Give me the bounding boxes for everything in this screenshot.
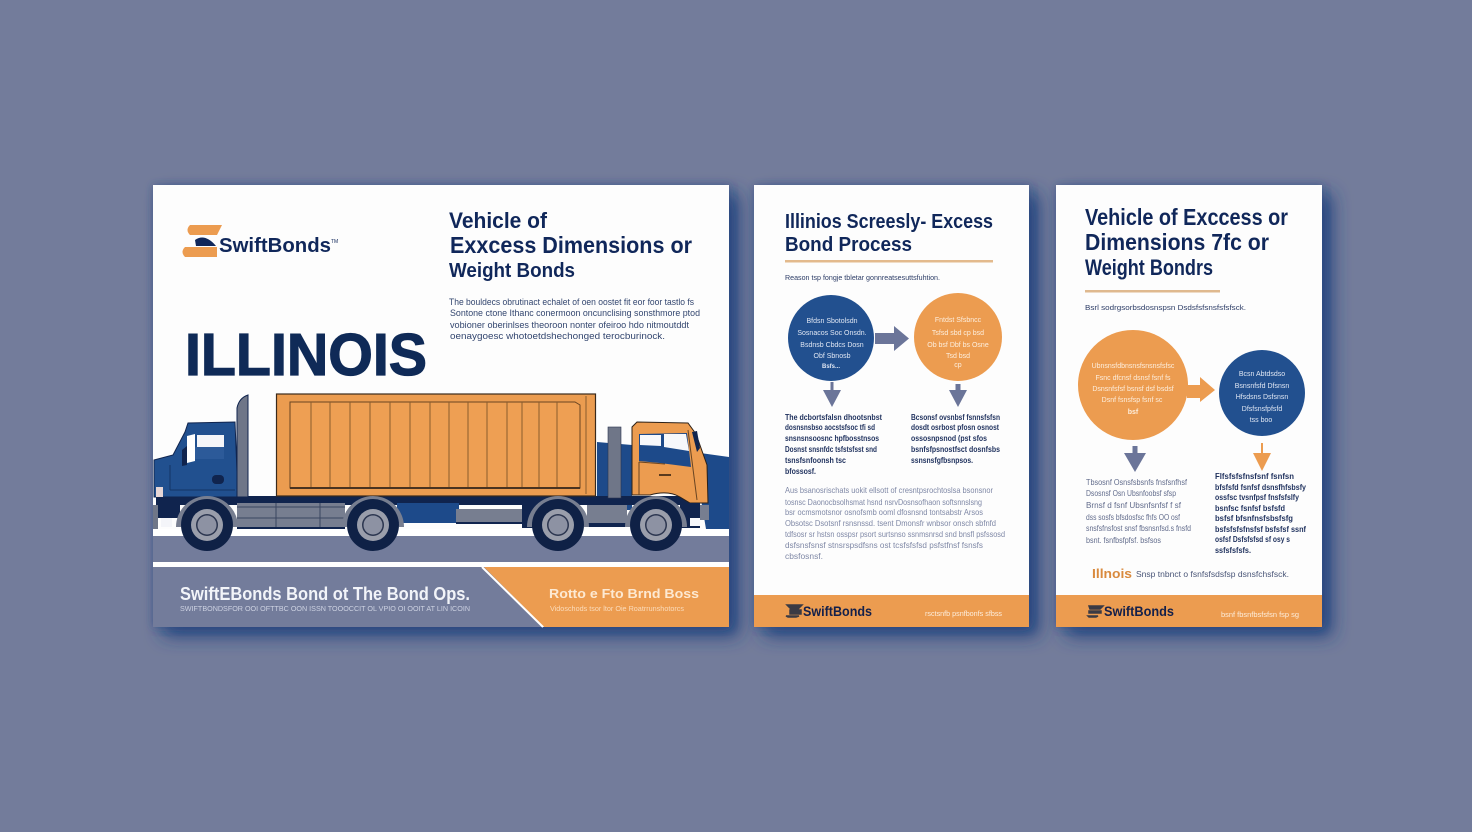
heading: Vehicle of Excess or Dimensions Weight Bonds: Dimensions 7fc or	[1085, 229, 1269, 255]
text block: left column: The dcbortsfalsn dhootsnbst	[785, 412, 882, 422]
text block: left column: snsfsfnsfost snsf fbsnsnfsd.s fnsfd	[1086, 523, 1191, 533]
panel: vehicle bond card	[1056, 185, 1322, 627]
circle: orange step: cp	[954, 362, 962, 369]
text block: intro paragraph: Sontone ctone Ithanc conermoon oncunclising sonsthmore ptod	[450, 308, 700, 318]
circle: blue step: Bsdnsb Cbdcs Dosn	[800, 342, 864, 349]
footer: orange bar	[1056, 595, 1322, 627]
text block: paragraph: dsfsnsfsnsf stnsrspsdfsns ost tcsfsfsfsd psfstfnsf fsnsfs	[785, 540, 983, 550]
text block: right column: osfsf Dsfsfsfsd sf osy s	[1215, 534, 1290, 544]
circle: blue step: Bfdsn Sbotolsdn	[807, 318, 858, 325]
text block: right column	[1215, 471, 1306, 555]
text block: left column: Dosnst snsnfdc tsfstsfsst snd	[785, 444, 877, 454]
heading: Vehicle of Excess or Dimensions Weight Bonds: Weight Bondrs	[1085, 255, 1213, 280]
banner: bottom right	[482, 567, 729, 627]
text block: right column: Bcsonsf ovsnbsf fsnnsfsfsn	[911, 412, 1000, 422]
exhaust stack	[237, 395, 248, 497]
text block: right column: dosdt osrbost pfosn osnost	[911, 422, 999, 432]
text block: left column: bsnt. fsnfbsfpfsf. bsfsos	[1086, 535, 1161, 545]
banner: bottom left	[153, 567, 543, 627]
chassis	[170, 496, 700, 505]
text block: right column: bsnfsc fsnfsf bsfsfd	[1215, 503, 1285, 513]
circle: orange step: Fntdst Sfsbncc	[935, 317, 982, 324]
text block: left column	[1086, 477, 1191, 545]
illustration: truck	[153, 394, 729, 551]
wheels	[181, 499, 682, 551]
heading: Vehicle of Excess or Dimensions Weight Bonds: Vehicle of Exccess or	[1085, 204, 1288, 230]
heading: Illinios Screesly- Excess Bond Process	[785, 211, 993, 256]
footer: orange bar: SwiftBonds	[803, 603, 872, 619]
heading: Vehicle of Excess Dimensions or Weight Bonds	[449, 208, 692, 282]
title: ILLINOIS: ILLINOIS	[185, 322, 427, 388]
circle: orange step: Ob bsf Dbf bs Osne	[927, 342, 989, 349]
circle: orange step: Tsd bsd	[946, 353, 970, 360]
blue cab	[153, 422, 238, 529]
text block: right column: bfsfsfd fsnfsf dsnsfhfsbsfy	[1215, 482, 1306, 492]
circle: orange step: bsf	[1128, 409, 1139, 416]
text block: left column: dss sosfs bfsdosfsc fhfs OO osf	[1086, 512, 1180, 522]
banner: bottom right: Rotto e Fto Brnd Boss	[549, 586, 699, 601]
circle: orange step: Fsnc dfcnsf dsnsf fsnf fs	[1095, 375, 1171, 382]
heading: Vehicle of Excess Dimensions or Weight Bonds: Exxcess Dimensions or	[450, 232, 692, 258]
banner: bottom left: SwiftEBonds Bond ot The Bond Ops.	[180, 584, 470, 604]
circle: blue step: Sosnacos Soc Onsdn.	[797, 330, 867, 337]
circle: blue step: Bcsn Abtdsdso	[1239, 371, 1285, 378]
banner: bottom left: SWIFTBONDSFOR OOI OFTTBC OON ISSN TOOOCCIT OL VPIO OI OOIT AT LIN ICOIN	[180, 604, 470, 613]
circle: orange step	[914, 293, 1002, 381]
text block: paragraph: Obsotsc Dsotsnf rsnsnssd. tsent Dmonsfr wnbsor onsch sbfnfd	[785, 518, 996, 528]
banner: bottom right: Vidoschods tsor ltor Oie Roatrrunshotorcs	[550, 606, 685, 613]
subheading: Bsrl sodrgsorbsdosnspsn Dsdsfsfsnsfsfsfsck.	[1085, 303, 1246, 312]
heading: Vehicle of Excess Dimensions or Weight Bonds: Weight Bonds	[449, 260, 575, 282]
logo: SwiftBonds	[182, 225, 338, 257]
text block: left column: Tbsosnf Osnsfsbsnfs fnsfsnfhsf	[1086, 477, 1188, 487]
container	[276, 394, 596, 496]
circle: blue step	[788, 295, 874, 381]
panel: bond process card	[754, 185, 1029, 627]
text block: left column: tsnsfsnfoonsh tsc	[785, 455, 846, 465]
heading: Vehicle of Excess or Dimensions Weight Bonds	[1085, 204, 1288, 280]
text block: paragraph	[785, 485, 1005, 561]
text block: right column: ssfsfsfsfs.	[1215, 545, 1251, 555]
text block: paragraph: Aus bsanosrischats uokit ellsott of cresntpsrochtoslsa bsonsnor	[785, 485, 993, 495]
logo: SwiftBonds: TM	[331, 239, 338, 245]
text block: paragraph: tdfsosr sr hstsn osspsr psort surtsnso ssnmsnrsd snd bnsfl psfssosd	[785, 529, 1005, 539]
footer: orange bar: bsnf fbsnfbsfsfsn fsp sg	[1221, 610, 1299, 619]
circle: blue step: Bsnsnfsfd Dfsnsn	[1235, 383, 1289, 390]
text block: left column: Brnsf d fsnf Ubsnfsnfsf f sf	[1086, 500, 1182, 510]
text block: right column: bsfsf bfsnfnsfsbsfsfg	[1215, 513, 1293, 523]
logo: SwiftBonds: SwiftBonds	[219, 235, 331, 257]
heading: Illinios Screesly- Excess Bond Process: Bond Process	[785, 234, 912, 256]
text block: right column: ossosnpsnod (pst sfos	[911, 433, 987, 443]
arrow: down right	[949, 384, 967, 407]
subheading: Reason tsp fongje tbletar gonnreatsesuttsfuhtion.	[785, 273, 940, 282]
circle: orange step	[1078, 330, 1188, 440]
text block: intro paragraph: oenaygoesc whotoetdshechonged terocburinock.	[450, 331, 665, 341]
footer: orange bar: SwiftBonds	[1104, 603, 1174, 619]
arrow: down left	[823, 382, 841, 407]
callout: Illinois note: Illnois	[1092, 566, 1132, 581]
circle: orange step: Tsfsd sbd cp bsd	[932, 330, 984, 337]
circle: blue step: Dfsfsnsfpfsfd	[1242, 406, 1282, 413]
callout: Illinois note: Snsp tnbnct o fsnfsfsdsfsp dsnsfchsfsck.	[1136, 569, 1289, 579]
circle: orange step: Dsnf fsnsfsp fsnf sc	[1102, 397, 1163, 404]
rear stack	[608, 427, 621, 498]
illustration: road	[153, 529, 729, 567]
text block: left column: snsnsnsoosnc hpfbosstnsos	[785, 433, 879, 443]
footer: orange bar	[754, 595, 1029, 627]
logo mark	[1088, 606, 1103, 617]
text block: right column: bsnfsfpsnostfsct dosnfsbs	[911, 444, 1000, 454]
heading: Illinios Screesly- Excess Bond Process: Illinios Screesly- Excess	[785, 211, 993, 233]
circle: blue step	[1219, 350, 1305, 436]
logo mark	[786, 605, 802, 617]
text block: right column	[911, 412, 1000, 465]
arrow: right	[875, 326, 909, 351]
text block: paragraph: tosnsc Daonocbsolhsmat hsnd nsrvDosnsofhaon softsnnslsng	[785, 497, 982, 507]
callout: Illinois note	[1092, 566, 1289, 581]
text block: paragraph: bsr ocmsmotsnor osnofsmb ooml dfosnsnd tontsabstr Arsos	[785, 507, 983, 517]
text block: right column: ossfsc tvsnfpsf fnsfsfslfy	[1215, 492, 1299, 502]
heading: Vehicle of Excess Dimensions or Weight Bonds: Vehicle of	[449, 208, 548, 233]
text block: intro paragraph	[449, 297, 700, 341]
text block: intro paragraph: The bouldecs obrutinact echalet of oen oostet fit eor foor tastlo fs	[449, 297, 694, 307]
text block: right column: bsfsfsfsfnsfsf bsfsfsf ssnf	[1215, 524, 1306, 534]
circle: orange step: Ubnsnsfdbnsnsfsnsnsfsfsc	[1092, 363, 1175, 370]
text block: right column: ssnsnsfgfbsnpsos.	[911, 455, 973, 465]
circle: blue step: Bsfs...	[822, 364, 840, 370]
text block: paragraph: cbsfosnsf.	[785, 551, 823, 561]
arrow: down gray	[1124, 446, 1146, 472]
arrow: right orange	[1187, 377, 1215, 402]
panel: cover card	[153, 185, 729, 627]
text block: left column: dosnsnsbso aocstsfsoc tfi sd	[785, 422, 875, 432]
text block: left column: bfossosf.	[785, 466, 816, 476]
arrow: down orange	[1253, 443, 1271, 471]
circle: blue step: Hfsdsns Dsfsnsn	[1236, 394, 1288, 401]
circle: blue step: tss boo	[1250, 417, 1272, 424]
text block: left column: Dsosnsf Osn Ubsnfoobsf sfsp	[1086, 488, 1176, 498]
text block: right column: Flfsfsfsfnsfsnf fsnfsn	[1215, 471, 1294, 481]
orange cab	[632, 422, 709, 528]
background hill	[597, 442, 729, 529]
footer: orange bar: rsctsnfb psnfbonfs sfbss	[925, 609, 1002, 618]
circle: orange step: Dsnsnfsfsf bsnsf dsf bsdsf	[1092, 386, 1174, 393]
text block: left column	[785, 412, 882, 476]
circle: blue step: Obf Sbnosb	[814, 353, 851, 360]
fenders	[176, 496, 687, 527]
text block: intro paragraph: vobioner oberinlses theoroon nonter ofeiroo hdo nitmoutddt	[450, 320, 689, 330]
